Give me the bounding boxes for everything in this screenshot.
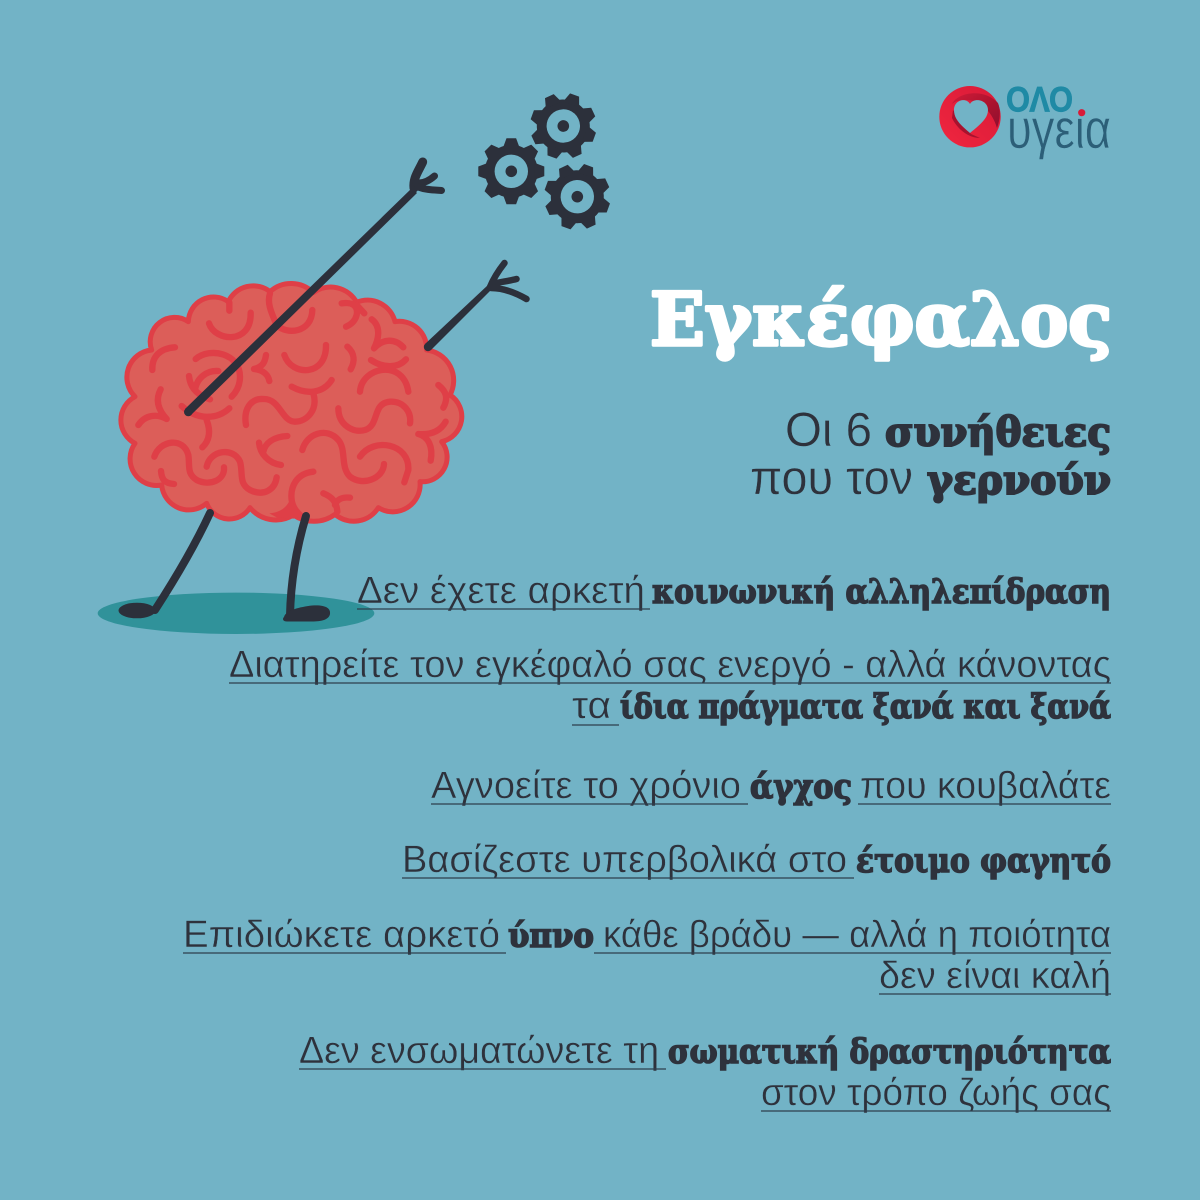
logo word ΟΛΟ: ΟΛΟ bbox=[1006, 80, 1073, 120]
habit 3 bbox=[431, 765, 1111, 807]
habit 5: ύπνο bbox=[508, 916, 594, 956]
habit 2: τα bbox=[572, 685, 611, 727]
logo: ΟΛΟ υγεια bbox=[939, 80, 1111, 160]
habit 2: ίδια πράγματα ξανά και ξανά bbox=[620, 687, 1111, 727]
habit 5: δεν είναι καλή bbox=[879, 955, 1111, 997]
habit 2 bbox=[229, 644, 1111, 727]
habit 5: κάθε βράδυ — αλλά η ποιότητα bbox=[603, 914, 1111, 956]
left raised arm and hand bbox=[184, 162, 442, 416]
title: Εγκέφαλος bbox=[650, 277, 1112, 363]
habit 4: Βασίζεστε υπερβολικά στο bbox=[402, 839, 847, 881]
right leg bbox=[283, 516, 330, 622]
logo red dot bbox=[1078, 109, 1085, 116]
habit 4 bbox=[402, 839, 1111, 881]
subtitle: γερνούν bbox=[927, 457, 1111, 504]
logo word υγεια: υγεια bbox=[1007, 97, 1111, 160]
habit 4: έτοιμο φαγητό bbox=[856, 841, 1111, 881]
icon: red heart ring bbox=[939, 86, 1001, 147]
habit 6: σωματική δραστηριότητα bbox=[668, 1032, 1111, 1072]
habit 1: Δεν έχετε αρκετή bbox=[357, 570, 645, 612]
habit 6: στον τρόπο ζωής σας bbox=[761, 1072, 1111, 1114]
habit 3: Αγνοείτε το χρόνιο bbox=[431, 765, 741, 807]
ground shadow bbox=[98, 593, 374, 634]
subtitle: Οι 6 bbox=[785, 404, 872, 457]
subtitle: συνήθειες bbox=[885, 409, 1111, 456]
brain character bbox=[118, 162, 526, 622]
habit 5: Επιδιώκετε αρκετό bbox=[183, 914, 500, 956]
habit 3: άγχος bbox=[750, 767, 852, 807]
habit 3: που κουβαλάτε bbox=[860, 765, 1111, 807]
habit 1 bbox=[357, 570, 1111, 612]
habit 5 bbox=[183, 914, 1111, 997]
right raised arm and hand bbox=[424, 263, 526, 351]
left leg bbox=[118, 513, 210, 618]
subtitle bbox=[750, 404, 1111, 505]
habit 1: κοινωνική αλληλεπίδραση bbox=[652, 572, 1111, 612]
icon: three gears bbox=[478, 84, 620, 239]
habit 6 bbox=[299, 1030, 1111, 1114]
habit 2: Διατηρείτε τον εγκέφαλό σας ενεργό - αλλά κάνοντας bbox=[229, 644, 1111, 686]
brain body bbox=[121, 283, 462, 521]
subtitle: που τον bbox=[750, 452, 913, 505]
habit 6: Δεν ενσωματώνετε τη bbox=[299, 1030, 659, 1072]
